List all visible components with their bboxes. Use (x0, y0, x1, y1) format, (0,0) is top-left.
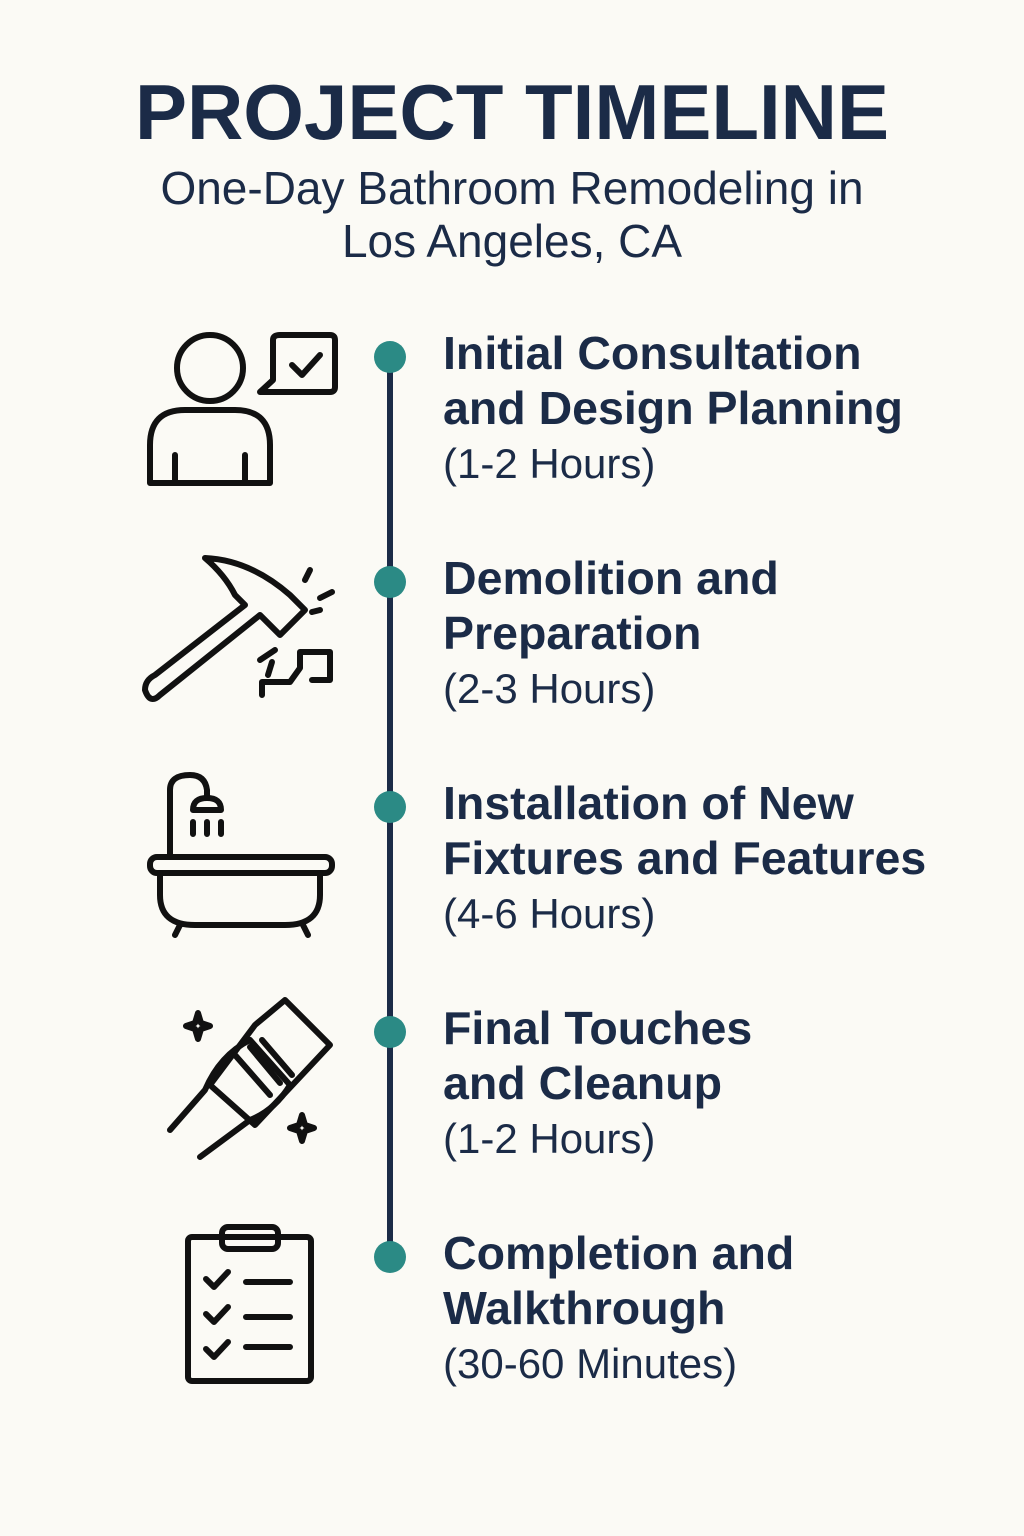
step 2 text: (2-3 Hours) (443, 665, 655, 712)
icon: cleaning hand (167, 997, 333, 1160)
step 3 text (443, 777, 926, 937)
subtitle: One-Day Bathroom Remodeling in (160, 162, 864, 214)
step 2 text: Demolition and (443, 552, 779, 604)
step 3 text: Installation of New (443, 777, 854, 829)
step 1 text: Initial Consultation (443, 327, 861, 379)
title: PROJECT TIMELINE (135, 68, 889, 156)
step 4 text: (1-2 Hours) (443, 1115, 655, 1162)
icon: clipboard checklist (185, 1224, 314, 1384)
step 5 text (443, 1227, 794, 1387)
step 1 text: and Design Planning (443, 382, 903, 434)
icon: consultation person (147, 332, 338, 486)
step 5 text: Completion and (443, 1227, 794, 1279)
icon: bathtub (147, 772, 335, 938)
icon: hammer (142, 555, 336, 702)
step 1 text: (1-2 Hours) (443, 440, 655, 487)
step 4 text: and Cleanup (443, 1057, 722, 1109)
step 3 text: Fixtures and Features (443, 832, 926, 884)
step 2 text: Preparation (443, 607, 701, 659)
step 3 text: (4-6 Hours) (443, 890, 655, 937)
step 5 text: (30-60 Minutes) (443, 1340, 737, 1387)
step 4 text (443, 1002, 752, 1162)
step 2 text (443, 552, 779, 712)
subtitle (160, 162, 864, 267)
timeline line and dots (374, 341, 406, 1273)
subtitle: Los Angeles, CA (342, 215, 682, 267)
step 1 text (443, 327, 903, 487)
step 4 text: Final Touches (443, 1002, 752, 1054)
step 5 text: Walkthrough (443, 1282, 725, 1334)
